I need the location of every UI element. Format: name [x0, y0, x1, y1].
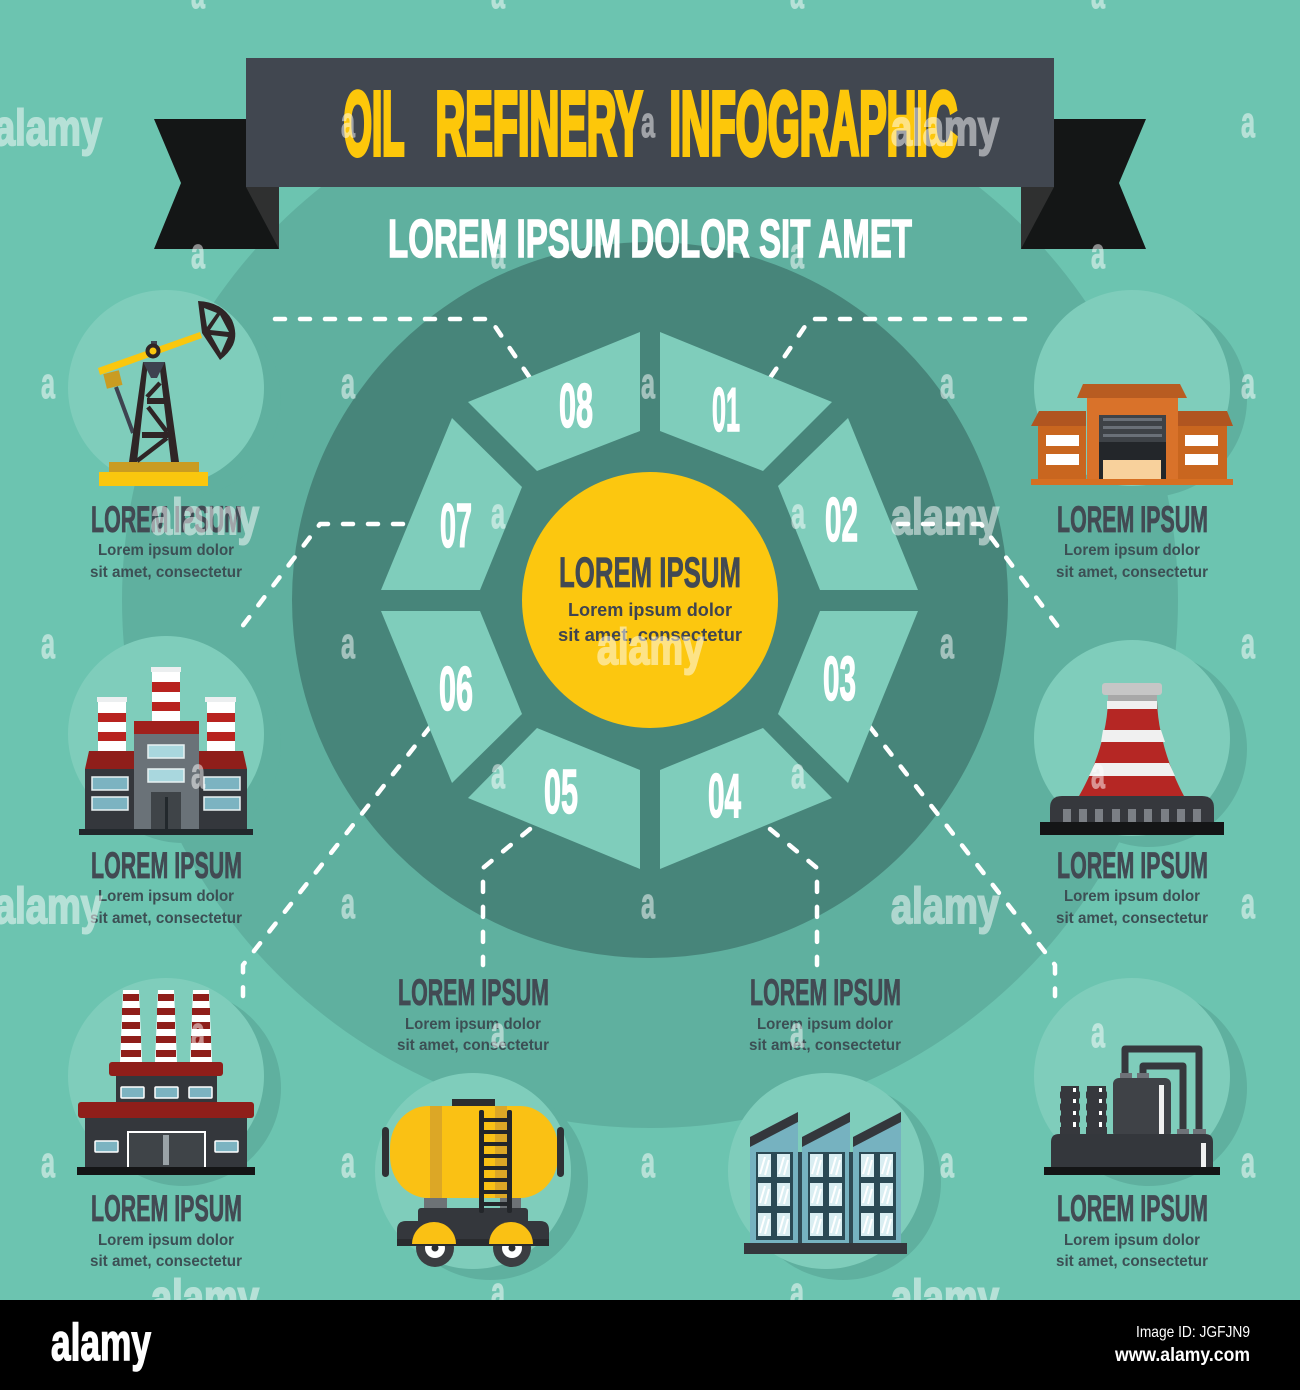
- watermarks: a: [41, 1138, 55, 1187]
- watermarks: alamy: [891, 100, 999, 156]
- info block bottom center right: [749, 972, 901, 1054]
- info block middle left: [90, 845, 242, 927]
- info block top right: Lorem ipsum dolor: [1064, 542, 1200, 559]
- info block bottom center left: sit amet, consectetur: [397, 1037, 549, 1054]
- segment 06: [381, 611, 522, 783]
- info block middle left: LOREM IPSUM: [91, 845, 242, 886]
- watermarks: alamy: [151, 489, 259, 545]
- segment 07: 07: [440, 492, 472, 561]
- icon: cooling tower: [1040, 683, 1224, 835]
- footer bar: [0, 1300, 1300, 1390]
- info block bottom left: LOREM IPSUM: [91, 1188, 242, 1229]
- info block bottom center left: Lorem ipsum dolor: [405, 1016, 541, 1033]
- footer bar: alamy: [51, 1314, 151, 1372]
- watermarks: a: [1241, 1138, 1255, 1187]
- center circle: [522, 472, 778, 728]
- info block bottom center left: [397, 972, 549, 1054]
- info block bottom right: sit amet, consectetur: [1056, 1253, 1208, 1270]
- watermarks: a: [1091, 749, 1105, 798]
- watermarks: a: [491, 489, 505, 538]
- info block top left: LOREM IPSUM: [91, 499, 242, 540]
- ribbon banner: [154, 58, 1146, 249]
- info block middle left: sit amet, consectetur: [90, 910, 242, 927]
- watermarks: a: [641, 359, 655, 408]
- segment wheel: [381, 332, 918, 869]
- large background circle: [122, 72, 1178, 1128]
- info block middle right: [1056, 845, 1208, 927]
- footer bar: Image ID: JGFJN9: [1136, 1324, 1250, 1341]
- watermarks: a: [641, 98, 655, 147]
- dashed connector lines: [238, 319, 1062, 996]
- watermarks: a: [1241, 619, 1255, 668]
- watermarks: a: [1091, 1008, 1105, 1057]
- watermarks: a: [341, 1138, 355, 1187]
- watermarks: a: [940, 619, 954, 668]
- info block top right: [1056, 499, 1208, 581]
- segment 03: [778, 611, 918, 783]
- segment 08: [468, 332, 640, 471]
- watermarks: a: [41, 359, 55, 408]
- watermarks: a: [791, 489, 805, 538]
- watermarks: a: [940, 1138, 954, 1187]
- watermarks: a: [41, 619, 55, 668]
- info block bottom center right: Lorem ipsum dolor: [757, 1016, 893, 1033]
- center circle: LOREM IPSUM: [559, 549, 741, 597]
- info block bottom right: Lorem ipsum dolor: [1064, 1232, 1200, 1249]
- watermarks: a: [491, 1268, 505, 1317]
- segment 07: [381, 418, 522, 590]
- segment 06: 06: [439, 655, 473, 724]
- icon circle backdrops: [68, 290, 1247, 1280]
- watermarks: a: [790, 1008, 804, 1057]
- info block top left: sit amet, consectetur: [90, 564, 242, 581]
- footer bar: www.alamy.com: [1114, 1345, 1250, 1366]
- segment 03: 03: [823, 645, 856, 714]
- watermarks: a: [1091, 229, 1105, 278]
- watermarks: a: [491, 1008, 505, 1057]
- segment 08: 08: [559, 372, 593, 441]
- watermarks: a: [790, 1268, 804, 1317]
- watermarks: alamy: [151, 1270, 259, 1326]
- watermarks: a: [1241, 359, 1255, 408]
- watermarks: a: [191, 229, 205, 278]
- text: INFOGRAPHIC: [670, 74, 958, 174]
- segment 02: 02: [825, 486, 858, 555]
- info block top right: sit amet, consectetur: [1056, 564, 1208, 581]
- info block middle left: Lorem ipsum dolor: [98, 888, 234, 905]
- watermarks: a: [491, 749, 505, 798]
- watermarks: a: [341, 98, 355, 147]
- inner dark circle: [292, 242, 1008, 958]
- info block bottom left: [90, 1188, 242, 1270]
- info block bottom center left: LOREM IPSUM: [398, 972, 549, 1013]
- watermarks: alamy: [891, 489, 999, 545]
- watermarks: a: [341, 359, 355, 408]
- segment 01: 01: [712, 376, 740, 445]
- title: REFINERY: [436, 74, 642, 174]
- watermarks: alamy: [891, 878, 999, 934]
- watermarks: a: [790, 229, 804, 278]
- segment 05: [468, 728, 640, 869]
- segment 04: 04: [708, 762, 741, 831]
- center circle: sit amet, consectetur: [558, 625, 742, 645]
- watermarks: a: [791, 749, 805, 798]
- icon: glass factory building: [744, 1112, 907, 1254]
- info block top left: [90, 499, 242, 581]
- watermarks: a: [940, 359, 954, 408]
- info block middle right: sit amet, consectetur: [1056, 910, 1208, 927]
- icon: factory with three chimneys: [79, 667, 253, 835]
- watermarks: a: [341, 879, 355, 928]
- info block top left: Lorem ipsum dolor: [98, 542, 234, 559]
- subtitle: LOREM IPSUM DOLOR SIT AMET: [388, 209, 912, 269]
- icon: warehouse: [1031, 384, 1233, 485]
- watermarks: a: [1241, 98, 1255, 147]
- icon: tanker wagon: [382, 1099, 564, 1267]
- center circle: Lorem ipsum dolor: [568, 600, 732, 620]
- watermarks: a: [191, 1008, 205, 1057]
- watermarks: a: [341, 619, 355, 668]
- watermarks: a: [491, 229, 505, 278]
- watermarks: alamy: [891, 1270, 999, 1326]
- watermarks: a: [1241, 879, 1255, 928]
- info block bottom center right: sit amet, consectetur: [749, 1037, 901, 1054]
- watermarks: a: [641, 879, 655, 928]
- icon: oil pump jack: [98, 301, 235, 486]
- info block bottom center right: LOREM IPSUM: [750, 972, 901, 1013]
- info block bottom left: Lorem ipsum dolor: [98, 1232, 234, 1249]
- segment 02: [778, 418, 918, 590]
- segment 04: [660, 728, 832, 869]
- icon: refinery plant: [1044, 1049, 1220, 1175]
- watermarks: a: [191, 749, 205, 798]
- info block bottom left: sit amet, consectetur: [90, 1253, 242, 1270]
- watermarks: a: [641, 1138, 655, 1187]
- watermarks: alamy: [597, 619, 704, 675]
- info block middle right: Lorem ipsum dolor: [1064, 888, 1200, 905]
- segment 05: 05: [544, 758, 578, 827]
- info block bottom right: [1056, 1188, 1208, 1270]
- segment 01: [660, 332, 832, 471]
- icon: power plant: [77, 990, 255, 1175]
- title: OIL: [344, 74, 404, 174]
